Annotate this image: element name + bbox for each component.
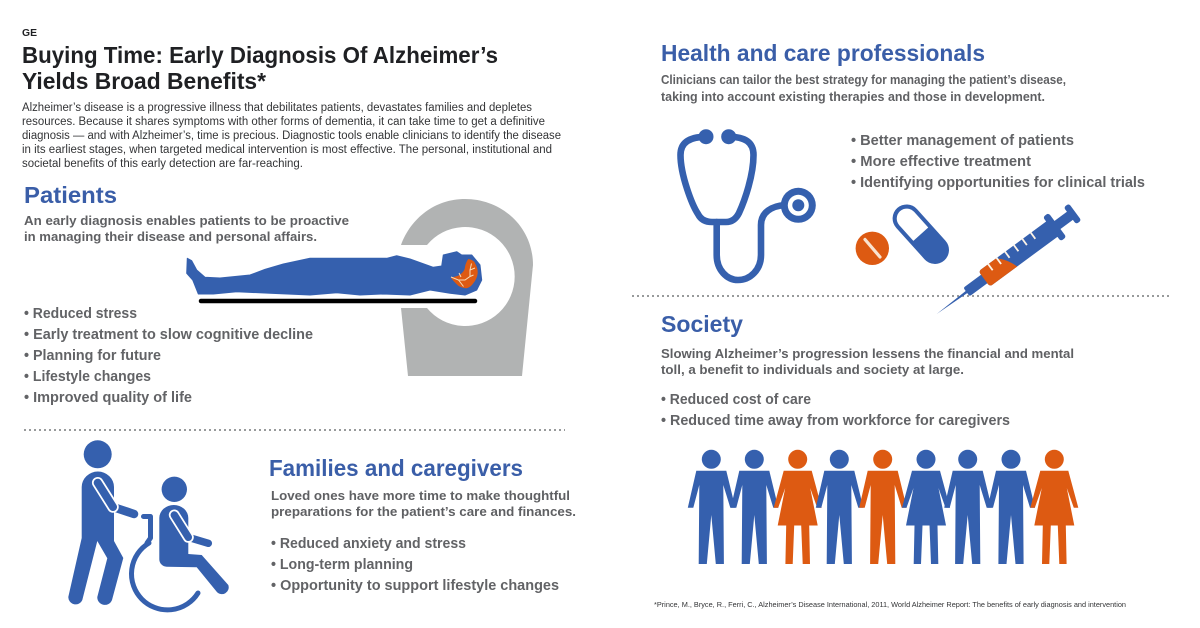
panel: health and care professionals [661,40,1145,280]
list: family benefits [271,536,559,594]
text: society summary: Slowing Alzheimer’s progression lessens the financial and mental [661,346,1074,361]
icon: caregiver pushing wheelchair [68,440,229,610]
patient body [187,252,482,295]
title: Yields Broad Benefits* [22,68,266,94]
icon: syringe [928,200,1084,326]
intro text block: in its earliest stages, when targeted medical intervention is most effective. The personal, institutional and [22,144,552,156]
panel: families and caregivers [68,440,576,610]
icon: capsule [887,199,955,270]
panel: patients [24,182,533,406]
heading: patients: Patients [24,182,117,208]
list: professional benefits: • Better management of patients [851,133,1074,149]
intro text block: resources. Because it shares symptoms with other forms of dementia, it can take time to get a definitive [22,116,545,128]
heading: health and care professionals: Health and care professionals [661,40,985,66]
list: family benefits: • Opportunity to support lifestyle changes [271,578,559,594]
text: professionals summary [661,72,1066,104]
text: patients summary: in managing their disease and personal affairs. [24,229,317,244]
list: family benefits: • Reduced anxiety and stress [271,536,466,552]
list: patient benefits: • Early treatment to slow cognitive decline [24,327,313,343]
text: society summary [661,346,1074,377]
panel: society [661,311,1078,564]
brain [451,259,478,288]
list: society benefits: • Reduced cost of care [661,392,811,408]
heading: society: Society [661,311,743,337]
list: family benefits: • Long-term planning [271,557,413,573]
icon: tablet [856,232,889,265]
list: professional benefits [851,133,1145,191]
text: patients summary [24,213,349,244]
list: professional benefits: • More effective treatment [851,154,1031,170]
icon: MRI scanner with patient [187,199,533,376]
heading: families and caregivers: Families and caregivers [269,455,523,481]
intro text block: societal benefits of this early detection are far-reaching. [22,158,303,170]
text: society summary: toll, a benefit to individuals and society at large. [661,362,964,377]
intro text block: diagnosis — and with Alzheimer’s, time is precious. Diagnostic tools enable clinicians to identify the disease [22,130,561,142]
list: patient benefits: • Lifestyle changes [24,369,151,385]
brand label: GE [22,28,37,39]
footnote: *Prince, M., Bryce, R., Ferri, C., Alzheimer’s Disease International, 2011, World Alzheimer Report: The benefits of early diagnosis and intervention [654,600,1126,609]
list: patient benefits: • Planning for future [24,348,161,364]
list: professional benefits: • Identifying opportunities for clinical trials [851,175,1145,191]
text: professionals summary: taking into account existing therapies and those in development. [661,89,1045,104]
MRI machine [401,199,533,376]
text: families summary: Loved ones have more time to make thoughtful [271,488,570,503]
title [22,42,498,94]
intro text block: Alzheimer’s disease is a progressive illness that debilitates patients, devastates families and depletes [22,102,532,114]
text: families summary [271,488,576,519]
list: society benefits [661,392,1010,429]
title: Buying Time: Early Diagnosis Of Alzheimer’s [22,42,498,68]
text: families summary: preparations for the patient’s care and finances. [271,504,576,519]
icon: row of people [688,450,1078,564]
list: patient benefits [24,306,313,406]
table [201,299,475,303]
caregiver [68,440,134,605]
intro text block [22,102,561,170]
icon: stethoscope [680,129,816,280]
list: patient benefits: • Reduced stress [24,306,137,322]
text: patients summary: An early diagnosis enables patients to be proactive [24,213,349,228]
seated person [159,477,229,594]
wheelchair [131,516,198,610]
list: society benefits: • Reduced time away from workforce for caregivers [661,413,1010,429]
text: professionals summary: Clinicians can tailor the best strategy for managing the patient’s disease, [661,72,1066,87]
list: patient benefits: • Improved quality of life [24,390,192,406]
